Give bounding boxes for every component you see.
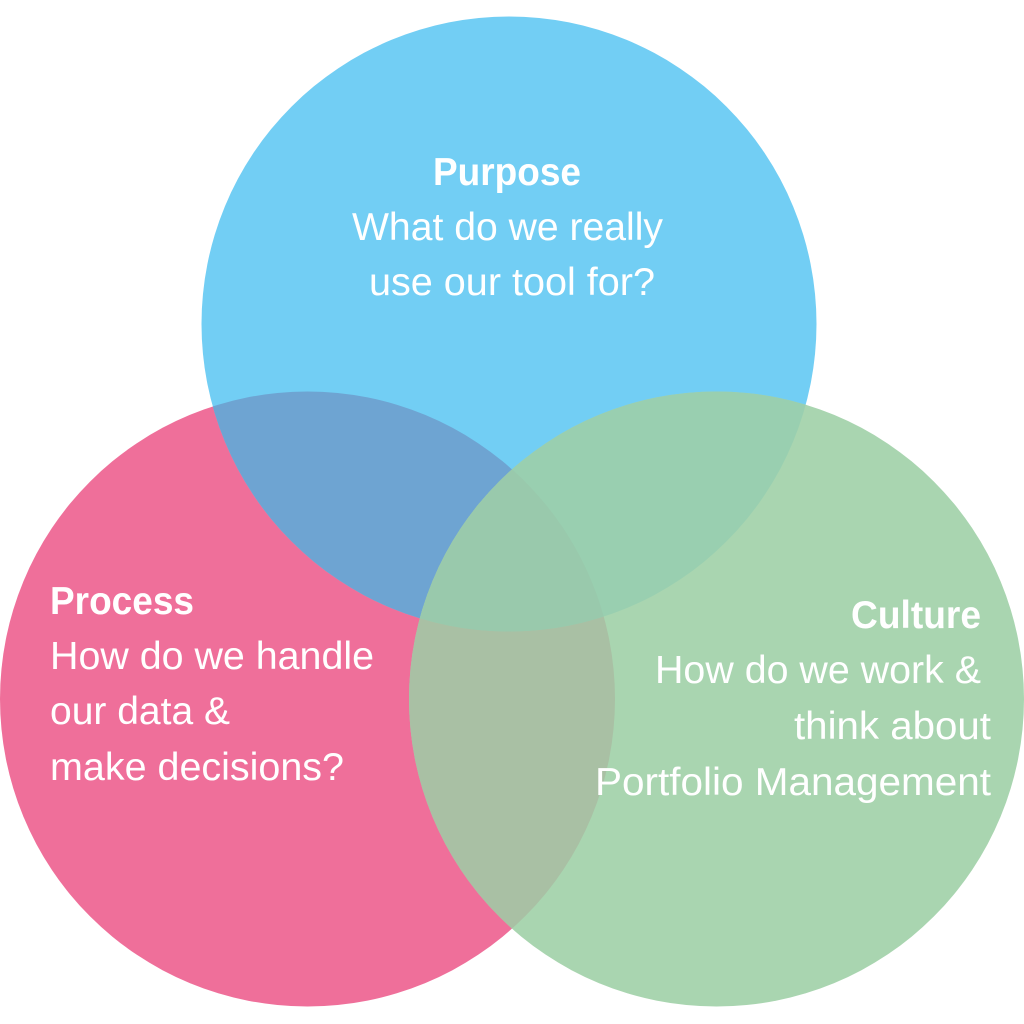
overlap: culture and process: [409, 616, 615, 928]
question line 2: think about: [794, 705, 991, 748]
circle: process: [0, 392, 615, 1006]
question line 2: our data &: [50, 690, 230, 733]
heading: purpose: Purpose: [433, 151, 581, 194]
overlap: purpose and process: [212, 392, 512, 618]
text block: culture: [595, 594, 991, 804]
overlap: culture and purpose: [512, 392, 806, 616]
heading: process: Process: [50, 580, 194, 623]
circle: culture: [409, 392, 1024, 1006]
question line 1: How do we handle: [50, 635, 374, 678]
question line 2: use our tool for?: [369, 261, 655, 304]
circle: purpose: [202, 16, 816, 632]
question line 3: Portfolio Management: [595, 761, 991, 804]
question line 1: What do we really: [352, 206, 663, 249]
question line 3: make decisions?: [50, 746, 344, 789]
text block: purpose: [352, 151, 663, 304]
text block: process: [50, 580, 374, 789]
question line 1: How do we work &: [655, 649, 981, 692]
overlap: all three circles: [409, 392, 1024, 1006]
heading: culture: Culture: [851, 594, 981, 637]
